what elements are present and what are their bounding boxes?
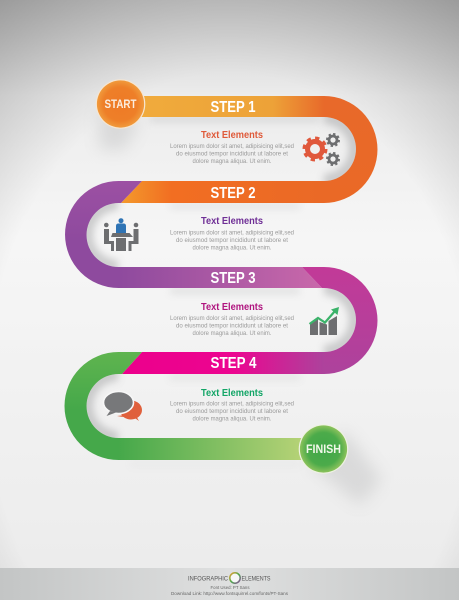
soft shadows under ribbon — [87, 118, 355, 464]
icon: meeting table — [104, 218, 138, 251]
text block: step 2: Lorem ipsum dolor sit amet, adipisicing elit,sed — [170, 230, 295, 236]
text block: step 3: Lorem ipsum dolor sit amet, adipisicing elit,sed — [170, 315, 295, 322]
text block: step 1: Lorem ipsum dolor sit amet, adipisicing elit,sed — [170, 143, 295, 150]
segment: orange arc — [324, 96, 377, 203]
text block: step 2: do eiusmod tempor incididunt ut labore et — [176, 237, 288, 244]
text block: step 4: dolore magna aliqua. Ut enim. — [192, 416, 272, 422]
segment: step 1 band — [140, 96, 324, 117]
segment: purple arc — [65, 181, 142, 288]
segment: green arc — [64, 352, 142, 460]
heading: step 3: STEP 3 — [210, 270, 256, 287]
finish badge — [299, 424, 348, 474]
footer logo: INFOGRAPHIC — [188, 576, 228, 582]
text block: step 1: dolore magna aliqua. Ut enim. — [192, 158, 272, 165]
segment: step 3 band — [118, 267, 322, 288]
segment: step 2 band — [121, 181, 324, 203]
footer credits: Download Link: http://www.fontsquirrel.com/fonts/PT-Sans — [171, 591, 289, 596]
footer credits: Font Used: PT Sans — [210, 585, 250, 590]
finish badge long shadow — [310, 430, 382, 505]
footer credits — [171, 585, 289, 596]
text block: step 4: Text Elements — [201, 387, 263, 399]
start badge — [96, 79, 145, 129]
text block: step 1: do eiusmod tempor incididunt ut labore et — [176, 150, 288, 158]
segment: magenta arc — [302, 267, 378, 374]
text block: step 1 — [170, 129, 295, 165]
ribbon path — [64, 96, 378, 460]
footer logo: ELEMENTS — [242, 576, 270, 582]
text block: step 3: dolore magna aliqua. Ut enim. — [192, 330, 272, 337]
segment: finish band — [118, 438, 305, 460]
heading: step 4: STEP 4 — [210, 355, 257, 372]
segment: step 4 band — [122, 352, 324, 374]
text block: step 3 — [170, 301, 295, 337]
icon: growth chart — [310, 307, 339, 335]
icon: speech bubbles — [104, 392, 142, 421]
heading: step 2: STEP 2 — [210, 185, 256, 202]
text block: step 1: Text Elements — [201, 129, 263, 141]
text block: step 4 — [170, 387, 295, 422]
start badge long shadow — [98, 110, 140, 150]
text block: step 3: Text Elements — [201, 301, 263, 313]
text block: step 2 — [170, 215, 295, 252]
text block: step 2: Text Elements — [201, 215, 263, 227]
icon: gears — [304, 134, 339, 165]
start badge: START — [104, 99, 136, 111]
finish badge: FINISH — [306, 444, 341, 456]
text block: step 2: dolore magna aliqua. Ut enim. — [192, 244, 272, 252]
footer logo — [188, 573, 270, 583]
text block: step 4: do eiusmod tempor incididunt ut labore et — [176, 408, 288, 415]
text block: step 3: do eiusmod tempor incididunt ut labore et — [176, 322, 288, 330]
text block: step 4: Lorem ipsum dolor sit amet, adipisicing elit,sed — [170, 400, 295, 408]
footer band — [0, 568, 459, 600]
heading: step 1: STEP 1 — [210, 99, 256, 116]
